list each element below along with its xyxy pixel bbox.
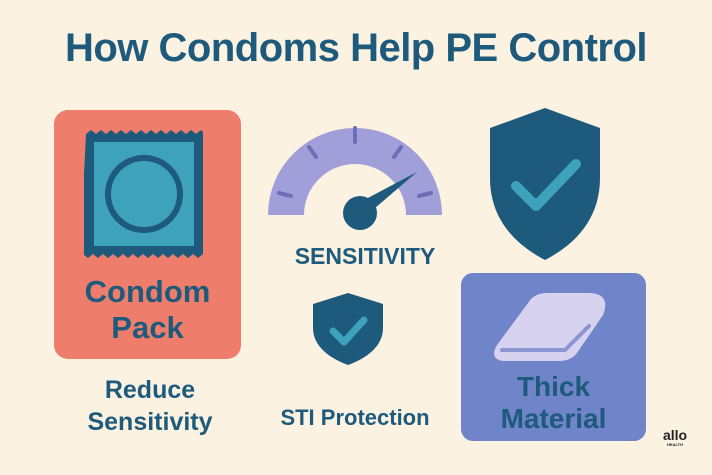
text: reduce sensitivity bbox=[87, 376, 213, 436]
title: How Condoms Help PE Control bbox=[65, 26, 647, 70]
label: condom pack bbox=[85, 274, 210, 345]
icon: big shield bbox=[490, 108, 600, 260]
icon: thick material bbox=[494, 293, 606, 361]
label: thick material: Thick bbox=[517, 371, 590, 402]
logo: allo: HEALTH bbox=[667, 442, 683, 447]
needle bbox=[349, 172, 417, 220]
text: reduce sensitivity: Sensitivity bbox=[87, 408, 213, 436]
label: thick material: Material bbox=[501, 403, 606, 434]
panel: thick material bbox=[461, 273, 646, 441]
label: condom pack: Condom bbox=[85, 274, 210, 309]
label: condom pack: Pack bbox=[111, 310, 184, 345]
label: STI protection: STI Protection bbox=[280, 405, 430, 430]
text: reduce sensitivity: Reduce bbox=[105, 376, 195, 404]
icon: gauge bbox=[268, 126, 442, 230]
label: sensitivity: SENSITIVITY bbox=[295, 243, 435, 269]
panel: condom pack bbox=[54, 110, 241, 359]
logo: allo: allo bbox=[663, 427, 687, 443]
icon: small shield bbox=[313, 293, 383, 365]
label: thick material bbox=[501, 371, 606, 434]
icon: condom pack bbox=[84, 130, 203, 258]
